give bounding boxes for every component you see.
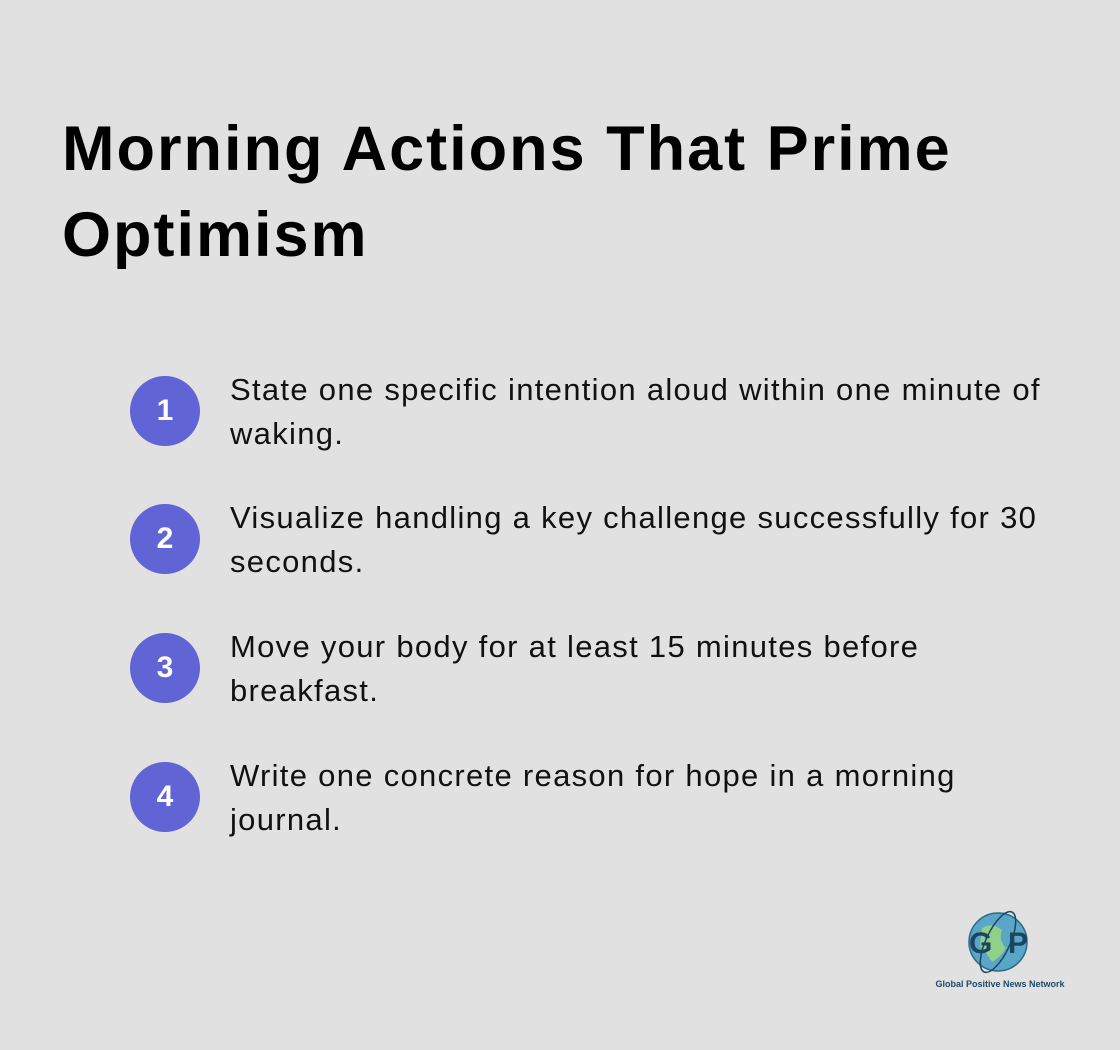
item 2 [130,500,1037,579]
item 3: breakfast. [230,673,379,708]
item 3: Move your body for at least 15 minutes before [230,629,919,664]
logo: Global Positive News Network [935,979,1065,989]
item 2: Visualize handling a key challenge successfully for 30 [230,500,1037,535]
item 1: 1 [157,394,173,427]
item 3: 3 [157,651,173,684]
item 4: journal. [230,802,342,837]
item 2: seconds. [230,544,364,579]
item 4: Write one concrete reason for hope in a morning [230,758,956,793]
item 1: waking. [230,416,344,451]
title: Optimism [62,200,369,270]
logo: P [1008,927,1028,960]
item 4: 4 [157,780,173,813]
logo: G [969,927,992,960]
title: Morning Actions That Prime [62,114,952,184]
item 2: 2 [157,522,173,555]
item 1: State one specific intention aloud within one minute of [230,372,1041,407]
title [62,114,952,270]
item 1 [130,372,1041,451]
item 3 [130,629,919,708]
item 4 [130,758,956,837]
logo [935,910,1065,989]
